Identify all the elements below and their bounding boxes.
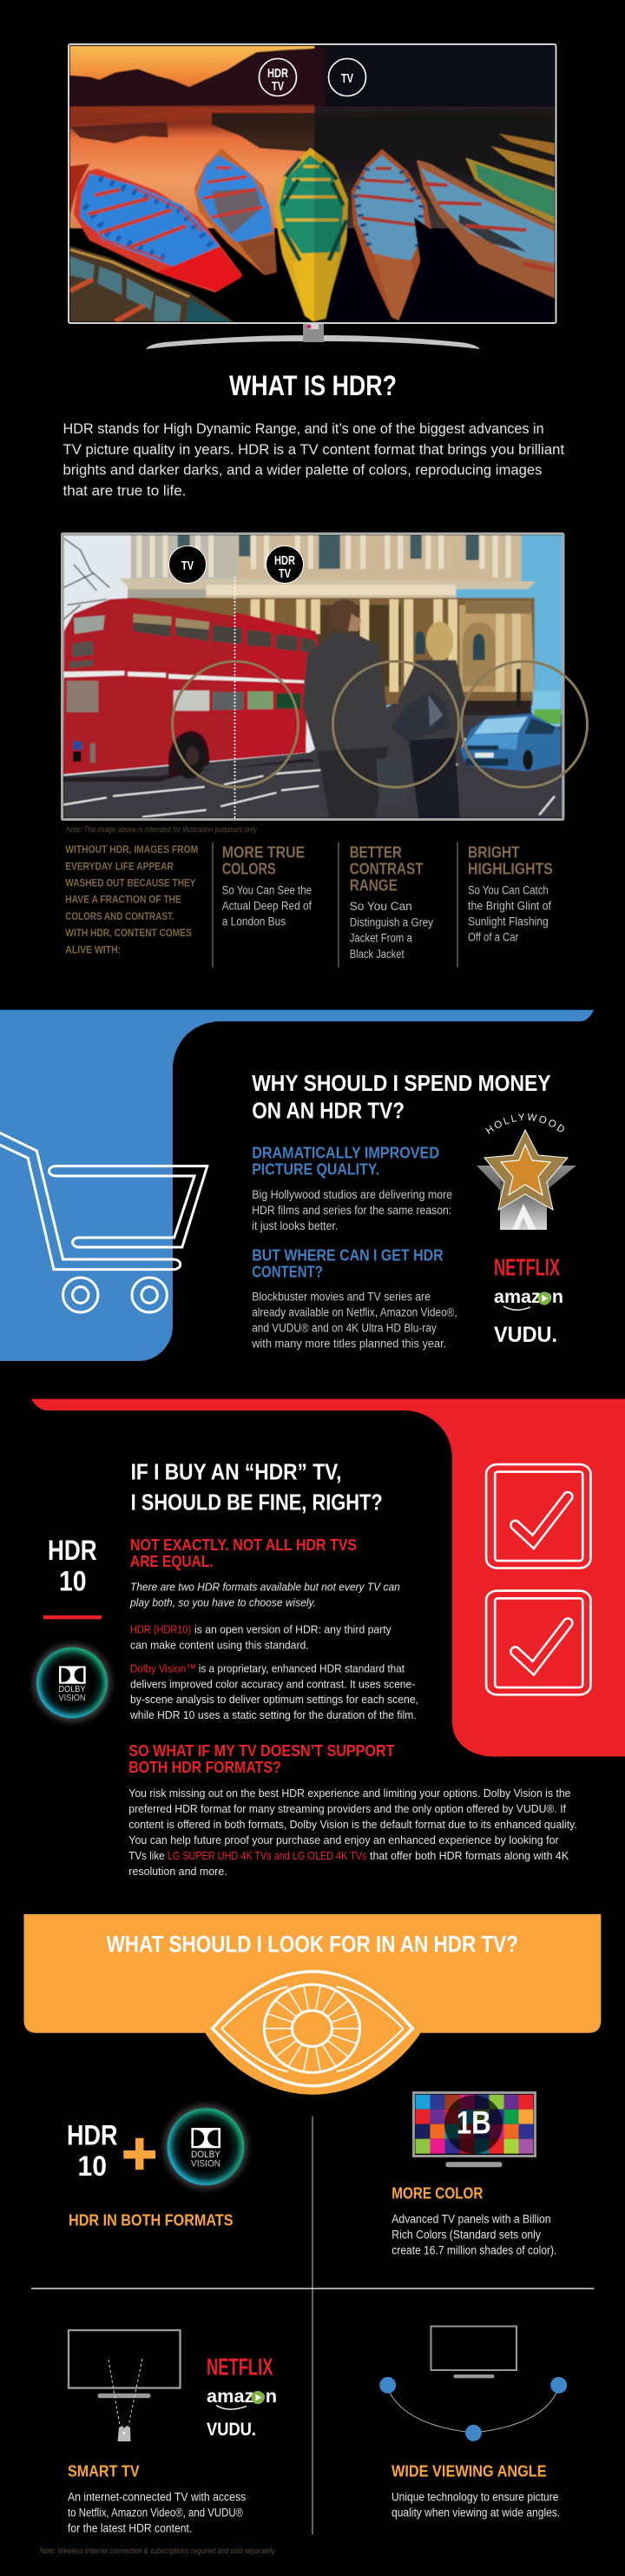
photo frame — [62, 533, 563, 820]
logo: Amazon: amazon — [207, 2387, 277, 2407]
heading: what is HDR: WHAT IS HDR? — [229, 370, 397, 401]
column: more true colors: COLORS — [222, 860, 276, 877]
boat: long blue — [398, 160, 555, 322]
boat: green and yellow — [274, 148, 348, 321]
text: Hollywood studios: Big Hollywood studios are delivering more — [252, 1188, 452, 1201]
intro column: without HDR: WITH HDR, CONTENT COMES — [65, 928, 192, 939]
text: Hollywood studios: it just looks better. — [252, 1219, 338, 1232]
column: bright highlights: Off of a Car — [468, 931, 519, 944]
note: wireless: Note: Wireless Internet connection & subscriptions required and sold separately — [40, 2546, 276, 2556]
feature: HDR in both formats — [67, 2099, 253, 2229]
text: blockbuster movies — [251, 1291, 457, 1351]
badge: TV: TV — [181, 558, 194, 573]
text: wide angle description: Unique technology to ensure picture — [391, 2490, 558, 2503]
heading: smart TV: SMART TV — [68, 2463, 140, 2480]
logo: VUDU: VUDU. — [207, 2420, 256, 2440]
badge: HDR TV: TV — [272, 79, 284, 94]
text: internet-connected: An internet-connected TV with access — [68, 2490, 246, 2503]
heading: why spend money: ON AN HDR TV? — [252, 1097, 405, 1123]
couple — [302, 599, 466, 818]
column: better contrast range — [350, 844, 433, 961]
subheading: both formats: BOTH HDR FORMATS? — [128, 1759, 281, 1776]
highlight circles — [172, 662, 587, 787]
subheading: picture quality — [252, 1144, 439, 1178]
text: risk paragraph: content is offered in both formats, Dolby Vision is the default format due to its enhanced quality. — [128, 1818, 577, 1831]
column: more true colors — [222, 844, 312, 928]
feature: smart TV — [68, 2330, 277, 2534]
panel: what to look for (orange) — [24, 1914, 601, 2095]
text: risk paragraph — [128, 1787, 577, 1878]
text: billion colors: Advanced TV panels with a Billion — [391, 2212, 550, 2225]
boat: pale blue — [352, 149, 431, 321]
column: bright highlights: HIGHLIGHTS — [468, 860, 553, 877]
text: two HDR formats — [129, 1581, 400, 1608]
note: illustration: Note: The image above is intended for illustration purposes only — [66, 825, 257, 834]
text: billion colors: Rich Colors (Standard sets only — [391, 2228, 541, 2241]
logo: Dolby Vision — [158, 2099, 253, 2195]
text: Dolby Vision description: while HDR 10 uses a static setting for the duration of the film. — [129, 1708, 417, 1721]
car and van — [461, 669, 561, 771]
text: billion colors — [391, 2212, 556, 2256]
badge: HDR TV: HDR — [267, 66, 288, 81]
text: Dolby Vision description — [129, 1661, 418, 1721]
logo: Amazon: amazon — [494, 1287, 563, 1307]
split line — [234, 577, 236, 818]
logo: VUDU: VUDU. — [494, 1323, 557, 1347]
icon: plus — [123, 2138, 155, 2170]
text: risk paragraph: LG SUPER UHD 4K TVs and LG OLED 4K TVs — [168, 1849, 367, 1862]
intro column: without HDR: WITHOUT HDR, IMAGES FROM — [65, 845, 198, 855]
badge: HDR TV — [259, 59, 297, 96]
logo: Netflix: NETFLIX — [494, 1253, 560, 1280]
intro paragraph — [62, 420, 564, 499]
subheading: picture quality: DRAMATICALLY IMPROVED — [252, 1144, 439, 1161]
building — [120, 535, 536, 705]
logo: Dolby Vision: DOLBY — [191, 2150, 221, 2160]
logo: Dolby Vision — [28, 1638, 116, 1727]
badge: TV: TV — [341, 71, 353, 86]
intro column: without HDR — [65, 845, 198, 955]
boat: bottom left — [69, 246, 234, 322]
icon: checkbox — [486, 1464, 590, 1569]
text: Dolby Vision description: by-scene analysis to deliver optimum settings for each scene, — [130, 1693, 418, 1706]
column: better contrast range: Distinguish a Grey — [350, 915, 433, 928]
heading: wide viewing angle: WIDE VIEWING ANGLE — [391, 2463, 547, 2480]
badge: HDR TV: HDR — [274, 553, 295, 568]
text: billion colors: create 16.7 million shades of color). — [391, 2243, 556, 2256]
column: more true colors: a London Bus — [222, 915, 286, 928]
text: risk paragraph: TVs like — [128, 1849, 165, 1862]
icon: checkbox — [486, 1591, 590, 1694]
badge: HDR TV — [266, 545, 304, 584]
subheading: not all equal: ARE EQUAL. — [130, 1553, 214, 1570]
hero TV with boats photo — [67, 44, 556, 349]
boats: back right — [465, 134, 555, 224]
logo: Netflix: NETFLIX — [207, 2353, 273, 2380]
subheading: where to get content: BUT WHERE CAN I GET HDR — [252, 1247, 444, 1265]
feature: more color — [391, 2093, 556, 2256]
boat: blue with wood floor — [194, 149, 277, 275]
text: Hollywood studios: HDR films and series for the same reason: — [252, 1204, 451, 1217]
subheading: picture quality: PICTURE QUALITY. — [252, 1160, 379, 1178]
road — [63, 703, 562, 818]
feature: wide viewing angle — [379, 2326, 567, 2519]
text: HDR10 description — [130, 1622, 391, 1652]
icon: 1B TV: 1B — [457, 2105, 491, 2141]
column: bright highlights: BRIGHT — [468, 844, 520, 862]
icon: Hollywood star — [477, 1113, 576, 1230]
subheading: not all equal: NOT EXACTLY. NOT ALL HDR TVS — [130, 1536, 357, 1554]
logo: HDR 10 — [67, 2119, 118, 2182]
intro paragraph: TV picture quality in years. HDR is a TV content format that brings you brilliant — [62, 441, 564, 458]
intro column: without HDR: WASHED OUT BECAUSE THEY — [65, 879, 196, 889]
text: risk paragraph: You can help future proof your purchase and enjoy an enhanced experience by looking for — [128, 1833, 559, 1846]
subheading: both formats: SO WHAT IF MY TV DOESN’T SUPPORT — [128, 1742, 395, 1760]
text: Dolby Vision description: Dolby Vision™ — [130, 1661, 196, 1674]
subheading: where to get content: CONTENT? — [252, 1264, 323, 1281]
column: more true colors: MORE TRUE — [222, 844, 305, 862]
column: bright highlights: Sunlight Flashing — [468, 915, 549, 928]
column: better contrast range: RANGE — [350, 877, 398, 895]
boat: red — [74, 168, 242, 293]
heading: HDR in both formats: HDR IN BOTH FORMATS — [69, 2211, 234, 2229]
text: risk paragraph: resolution and more. — [128, 1865, 227, 1878]
icon: eye — [213, 1972, 412, 2086]
column: better contrast range: So You Can — [350, 900, 412, 913]
logo: HDR 10 — [48, 1535, 97, 1596]
text: risk paragraph: that offer both HDR formats along with 4K — [370, 1849, 569, 1862]
subheading: not all equal — [130, 1536, 357, 1570]
column: better contrast range: BETTER — [350, 844, 402, 862]
intro paragraph: brights and darker darks, and a wider palette of colors, reproducing images — [62, 462, 542, 478]
text: Dolby Vision description: delivers improved color accuracy and contrast. It uses scene- — [130, 1677, 415, 1690]
text: internet-connected — [68, 2490, 246, 2534]
icon: TV with signal — [69, 2330, 181, 2441]
TV screen photo: boats — [67, 46, 556, 322]
icon: viewing arc — [379, 2326, 567, 2441]
badge: HDR TV: TV — [279, 566, 291, 581]
heading: why spend money: WHY SHOULD I SPEND MONEY — [252, 1070, 551, 1096]
badge: TV — [328, 59, 366, 96]
text: two HDR formats: play both, so you have to choose wisely. — [129, 1596, 316, 1608]
logo: Dolby Vision: VISION — [191, 2159, 220, 2170]
intro column: without HDR: EVERYDAY LIFE APPEAR — [65, 862, 174, 872]
text: blockbuster movies: with many more titles planned this year. — [251, 1338, 446, 1351]
column: more true colors: So You Can See the — [222, 883, 312, 896]
logo: Dolby Vision: DOLBY — [59, 1685, 86, 1694]
text: HDR10 description: is an open version of HDR: any third party — [194, 1622, 391, 1636]
text: Hollywood studios — [252, 1188, 452, 1232]
icon: 1B TV — [413, 2093, 535, 2167]
text: blockbuster movies: already available on Netflix, Amazon Video®, — [252, 1306, 457, 1319]
text: HDR10 description: can make content using this standard. — [130, 1638, 309, 1652]
text: HDR10 description: HDR (HDR10) — [130, 1622, 191, 1636]
text: two HDR formats: There are two HDR formats available but not every TV can — [130, 1581, 400, 1593]
text: wide angle description — [391, 2490, 560, 2519]
logo: Dolby Vision: VISION — [59, 1694, 85, 1703]
column: bright highlights: So You Can Catch — [468, 883, 549, 896]
intro paragraph: that are true to life. — [62, 483, 186, 499]
text: internet-connected: to Netflix, Amazon Video®, and VUDU® — [68, 2506, 243, 2519]
intro paragraph: HDR stands for High Dynamic Range, and it’s one of the biggest advances in — [62, 420, 544, 437]
logo: HDR 10: 10 — [78, 2150, 107, 2182]
icon: shopping cart — [0, 1132, 207, 1312]
heading: why spend money — [252, 1070, 551, 1123]
TV stand — [146, 323, 480, 349]
subheading: both formats — [128, 1742, 395, 1776]
heading: if I buy an HDR TV: I SHOULD BE FINE, RIGHT? — [131, 1489, 383, 1515]
column: better contrast range: Jacket From a — [350, 932, 412, 945]
logo: HDR 10: HDR — [67, 2119, 118, 2150]
intro column: without HDR: ALIVE WITH: — [65, 945, 121, 955]
London street photo — [62, 533, 587, 820]
panel: why spend money (blue) — [0, 1010, 594, 1361]
logo: HDR 10: HDR — [48, 1535, 97, 1566]
badge: TV — [168, 545, 207, 584]
bus — [63, 598, 319, 779]
heading: more color: MORE COLOR — [391, 2185, 483, 2203]
panel: HDR formats (red) — [31, 1399, 625, 1756]
column: more true colors: Actual Deep Red of — [222, 900, 312, 912]
column: bright highlights — [468, 844, 553, 944]
heading: if I buy an HDR TV: IF I BUY AN “HDR” TV, — [131, 1458, 342, 1484]
text: blockbuster movies: and VUDU® and on 4K Ultra HD Blu-ray — [252, 1322, 437, 1335]
text: blockbuster movies: Blockbuster movies and TV series are — [252, 1291, 431, 1304]
intro column: without HDR: HAVE A FRACTION OF THE — [65, 895, 181, 906]
text: wide angle description: quality when viewing at wide angles. — [391, 2506, 560, 2519]
TV frame — [69, 44, 556, 323]
text: risk paragraph: You risk missing out on the best HDR experience and limiting your options. Dolby Vision is the — [128, 1787, 571, 1800]
intro column: without HDR: COLORS AND CONTRAST. — [65, 912, 174, 922]
text: internet-connected: for the latest HDR content. — [68, 2521, 192, 2534]
subheading: where to get content — [252, 1247, 444, 1281]
column: better contrast range: Black Jacket — [350, 948, 405, 961]
heading: what to look for: WHAT SHOULD I LOOK FOR IN AN HDR TV? — [107, 1931, 518, 1957]
text: risk paragraph: preferred HDR format for many streaming providers and the only option offered by VUDU®. If — [128, 1802, 566, 1815]
icon: Hollywood star: HOLLYWOOD — [485, 1113, 564, 1134]
column: bright highlights: the Bright Glint of — [468, 900, 551, 912]
column: better contrast range: CONTRAST — [350, 860, 424, 877]
text: Dolby Vision description: is a proprietary, enhanced HDR standard that — [199, 1661, 405, 1674]
logo: HDR 10: 10 — [59, 1565, 87, 1596]
heading: if I buy an HDR TV — [131, 1458, 383, 1515]
